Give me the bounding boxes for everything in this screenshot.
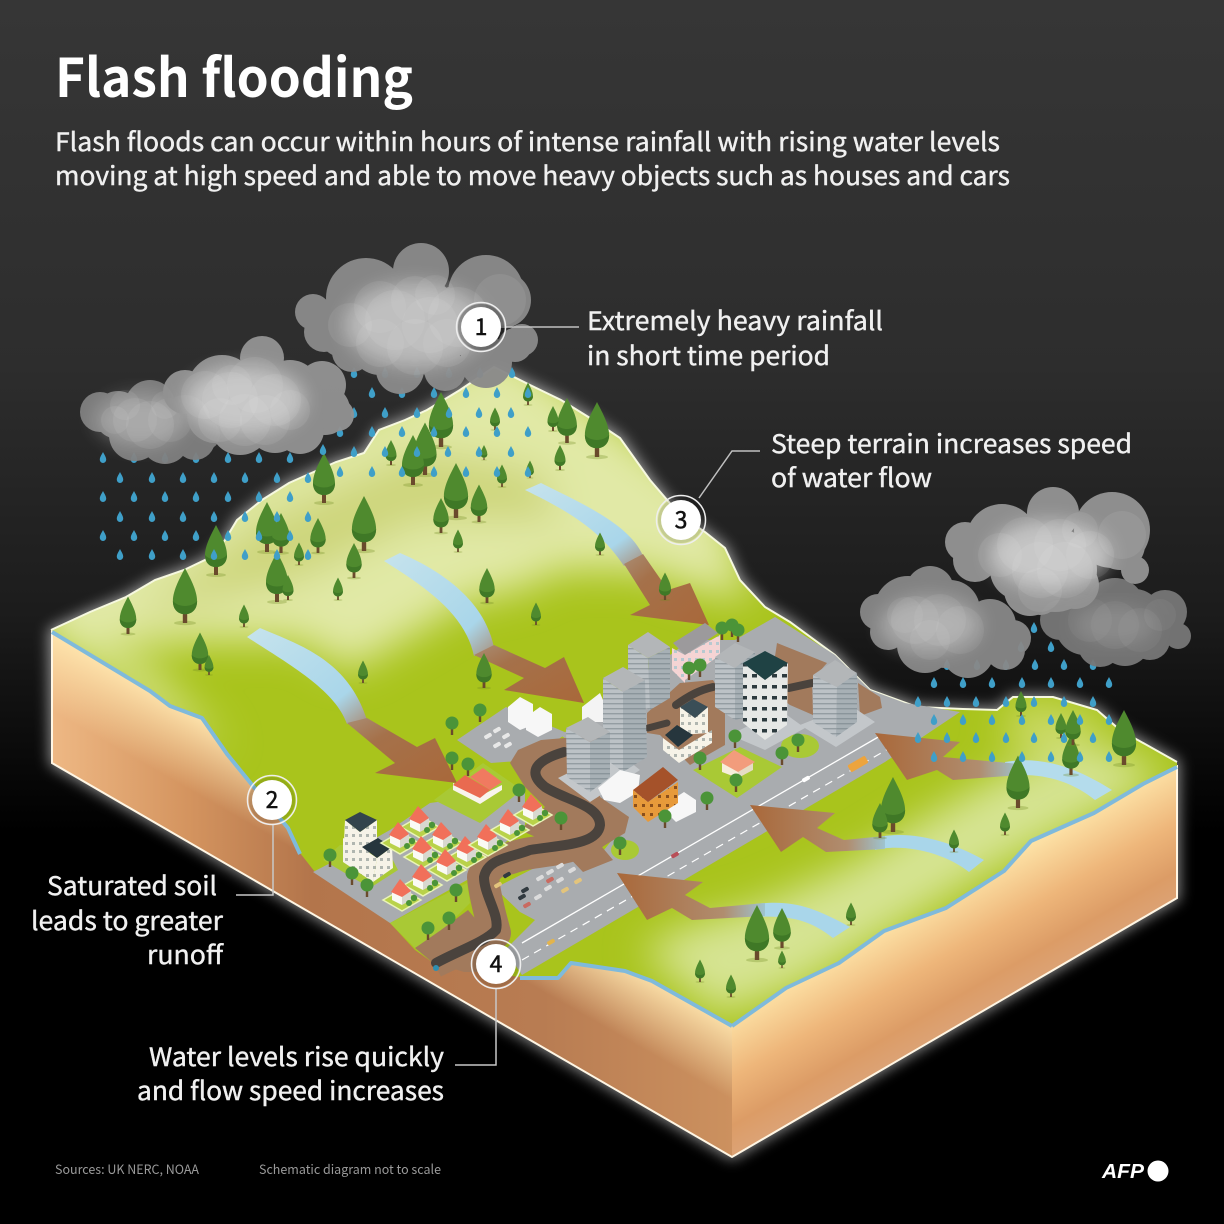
label 3: Steep terrain increases speed — [771, 424, 1132, 461]
subtitle text block — [55, 122, 1010, 193]
villa in garden — [720, 750, 755, 778]
callout 1: heavy rainfall — [456, 301, 883, 373]
label 2: Saturated soil — [47, 866, 217, 903]
right soil face — [732, 765, 1177, 1157]
label 2: leads to greater — [31, 901, 223, 938]
callout 4: water levels — [137, 940, 520, 1108]
marker 1 — [456, 302, 506, 352]
cloud: right lower right — [1040, 578, 1191, 667]
river and flow arrow: middle slope — [384, 553, 584, 703]
rain drops: right clouds — [915, 622, 1112, 762]
label 1: in short time period — [587, 336, 830, 373]
marker 3 — [656, 496, 706, 544]
cloud: right upper — [945, 487, 1150, 616]
orange brick building — [633, 767, 678, 822]
cars in car parks and on road — [484, 726, 869, 946]
mansion left rear — [343, 812, 377, 862]
panel: isometric landscape block — [40, 340, 1190, 1157]
cluster: towers and buildings — [343, 623, 875, 882]
cloud: left bright — [163, 336, 354, 455]
left soil top light — [52, 630, 732, 1157]
flow arrows from right slopes — [617, 733, 1112, 938]
label 4 — [137, 1037, 444, 1108]
callout 2: saturated soil — [31, 776, 296, 972]
river and arrow: mid right — [750, 805, 984, 872]
flood water spread — [415, 643, 882, 972]
title: Flash flooding — [55, 37, 413, 113]
river and flow arrow: upper slope — [525, 483, 709, 625]
river and flow arrow: left slope — [247, 628, 457, 783]
tower far left rear — [628, 632, 670, 710]
subtitle text block: moving at high speed and able to move heavy objects such as houses and cars — [55, 156, 1010, 193]
subtitle text block: Flash floods can occur within hours of intense rainfall with rising water levels — [55, 122, 1000, 159]
label 2: runoff — [147, 935, 225, 972]
river and arrow: near right — [617, 873, 850, 938]
river and arrow: far right — [875, 733, 1112, 800]
label 1 — [587, 301, 883, 373]
pink apartment building — [672, 623, 720, 683]
mansion centre rear — [680, 699, 708, 735]
flash flood river channel — [433, 683, 812, 971]
white highlight on ridge — [51, 367, 1177, 762]
marker 4 — [472, 940, 520, 988]
label 3: of water flow — [771, 458, 932, 495]
label 4: Water levels rise quickly — [149, 1037, 444, 1074]
tower pads — [558, 705, 875, 802]
sources text: Sources: UK NERC, NOAA — [55, 1159, 199, 1178]
label 4: and flow speed increases — [137, 1071, 444, 1108]
white vans and low blocks — [508, 697, 696, 822]
cloud: left dark — [80, 380, 220, 464]
white block behind — [582, 693, 603, 722]
left soil face — [52, 630, 732, 1157]
grass surface with shading — [40, 340, 1190, 1040]
marker 4: 4 — [490, 945, 503, 979]
callout 3: steep terrain — [656, 424, 1132, 544]
AFP logo: AFP — [1101, 1161, 1145, 1183]
marker 2: 2 — [266, 781, 278, 815]
marker 3: 3 — [675, 501, 687, 535]
tower rear right — [715, 643, 755, 720]
AFP logo — [1101, 1160, 1168, 1183]
red roof villa — [453, 768, 502, 804]
marker 1: 1 — [475, 308, 487, 342]
mansion left front — [343, 838, 393, 882]
block edge highlight — [52, 630, 1177, 1157]
mansion centre front — [663, 725, 712, 763]
dark roof tower — [743, 651, 788, 740]
cloud: top — [295, 243, 538, 394]
scale note: Schematic diagram not to scale — [259, 1159, 441, 1178]
houses in flood path — [381, 794, 552, 911]
tower right — [813, 660, 857, 737]
label 3 — [771, 424, 1132, 495]
tower front — [566, 717, 610, 792]
trees across the hillside — [120, 382, 1136, 998]
cloud: right lower left — [860, 566, 1031, 678]
label 1: Extremely heavy rainfall — [587, 301, 883, 338]
blue water lines along terrain edge — [52, 632, 1177, 1026]
city ground and road — [313, 617, 960, 975]
marker 2 — [248, 776, 296, 824]
glow around landscape block — [51, 367, 1177, 1157]
rain drops: left and top clouds — [100, 367, 531, 560]
label 2 — [31, 866, 225, 972]
tall tower centre — [603, 667, 647, 772]
